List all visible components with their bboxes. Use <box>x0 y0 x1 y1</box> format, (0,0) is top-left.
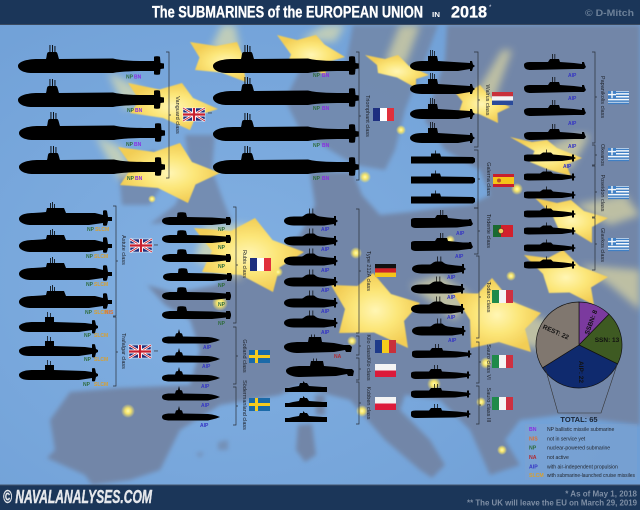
Astute class: SLCM <box>94 282 108 288</box>
title year: 2018 <box>451 2 487 22</box>
glow rays <box>95 25 640 350</box>
Vanguard class: Vanguard class <box>174 96 180 134</box>
Triomphant class <box>213 45 394 182</box>
Glavkos class <box>524 218 629 270</box>
Gotland class: AIP <box>203 345 212 351</box>
legend: NIS <box>529 436 538 442</box>
Rubis class: NP <box>218 283 226 289</box>
Triomphant class: NP <box>313 73 321 79</box>
title: The SUBMARINES of the EUROPEAN UNION <box>152 2 423 22</box>
Sodermanland class: Södermanland class <box>241 380 247 430</box>
pie chart <box>536 302 622 388</box>
Triomphant class: BN <box>322 143 330 149</box>
Trafalgar class: NP <box>83 382 91 388</box>
star 2 <box>277 35 345 75</box>
Poseidon class: Poseidon class <box>599 174 605 212</box>
credit: © D-Mitch <box>585 8 634 19</box>
EU stars <box>118 35 608 352</box>
Tridente class: Tridente class <box>485 214 491 248</box>
Type 212A class <box>284 208 396 336</box>
Trafalgar class <box>19 312 158 388</box>
Vanguard class: ** <box>208 112 212 118</box>
star 3 <box>128 83 218 130</box>
Astute class: SLCM <box>95 227 109 233</box>
Vanguard class: NP <box>126 142 134 148</box>
Sodermanland class <box>162 380 270 430</box>
star 1 <box>190 42 262 82</box>
Vanguard class: BN <box>134 74 142 80</box>
Kobben class <box>285 381 396 424</box>
Tridente class: AIP <box>456 231 465 237</box>
Triomphant class: NP <box>313 176 321 182</box>
Rubis class: Rubis class <box>241 250 247 278</box>
slice: REST <box>536 302 579 368</box>
Astute class: Astute class <box>120 235 126 265</box>
Type 212A class: Type 212A class <box>365 251 371 291</box>
Astute class: SLCM <box>94 310 108 316</box>
Vanguard class: NP <box>127 176 135 182</box>
legend: not active <box>547 455 569 461</box>
Vanguard class: NP <box>126 74 134 80</box>
Triomphant class: BN <box>322 106 330 112</box>
Triomphant class: BN <box>322 73 330 79</box>
Astute class: ** <box>154 244 158 250</box>
Todaro class: AIP <box>448 338 457 344</box>
Gotland class <box>162 327 270 390</box>
total funnel <box>545 365 617 413</box>
Rubis class: NP <box>218 264 226 270</box>
Galerna class <box>411 150 514 208</box>
Vanguard class: BN <box>134 142 142 148</box>
Todaro class: AIP <box>447 295 456 301</box>
Triomphant class: NP <box>313 143 321 149</box>
footer bar <box>0 484 640 510</box>
Sodermanland class: AIP <box>201 403 210 409</box>
Okeanos class: Okeanos <box>599 144 605 166</box>
Tridente class: AIP <box>455 254 464 260</box>
Type 212A class: AIP <box>321 288 330 294</box>
Type 212A class: AIP <box>321 268 330 274</box>
Papanikolis class: AIP <box>568 121 577 127</box>
legend: not in service yet <box>547 436 586 442</box>
Triomphant class: BN <box>322 176 330 182</box>
slice: SSN <box>579 314 622 364</box>
Trafalgar class: Trafalgar class <box>120 333 126 369</box>
Sauro class VI: Sauro class VI <box>485 344 491 380</box>
Trafalgar class: SLCM <box>94 333 108 339</box>
Papanikolis class: AIP <box>568 144 577 150</box>
site name: © NAVALANALYSES.COM <box>3 487 153 507</box>
Astute class: NP <box>86 254 94 260</box>
Sauro class III <box>411 384 513 424</box>
header bar <box>0 0 640 25</box>
Trafalgar class: ** <box>154 350 158 356</box>
slice: SSBN <box>579 302 609 345</box>
title in: IN <box>432 12 440 19</box>
Walrus class: Walrus class <box>484 85 490 116</box>
star 6 <box>453 85 510 123</box>
star 5 <box>365 55 429 88</box>
Glavkos class: Glavkos class <box>599 228 605 262</box>
Vanguard class <box>18 45 212 182</box>
legend: BN <box>529 427 537 433</box>
Trafalgar class: SLCM <box>94 382 108 388</box>
Gotland class: AIP <box>201 384 210 390</box>
Sodermanland class: AIP <box>200 423 209 429</box>
Rubis class: NP <box>218 321 226 327</box>
Okeanos class: AIP <box>563 164 572 170</box>
Kilo class Romania: NA <box>334 354 342 360</box>
asterisk: * <box>489 5 492 11</box>
Papanikolis class <box>524 52 629 150</box>
Rubis class <box>162 207 271 327</box>
star 10 <box>194 218 304 292</box>
Trafalgar class: NP <box>84 333 92 339</box>
star 12 <box>453 278 541 352</box>
Triomphant class: Triomphant class <box>364 95 370 137</box>
legend: with submarine-launched cruise missiles <box>547 473 635 479</box>
Triomphant class: NP <box>313 106 321 112</box>
Todaro class: AIP <box>447 275 456 281</box>
Vanguard class: NP <box>127 108 135 114</box>
legend: NA <box>529 455 537 461</box>
pie labels <box>541 309 620 383</box>
pie labels: REST: 22 <box>541 324 570 342</box>
pie labels: SSBN: 8 <box>584 309 599 336</box>
star 9 <box>524 250 608 305</box>
legend: NP <box>529 446 537 452</box>
star 7 <box>510 137 582 176</box>
Type 212A class: AIP <box>321 330 330 336</box>
pie labels: SSN: 13 <box>595 337 620 344</box>
Papanikolis class: AIP <box>568 73 577 79</box>
star 8 <box>535 198 608 243</box>
legend: with air-independent propulsion <box>547 464 618 470</box>
legend <box>525 424 637 480</box>
Papanikolis class: AIP <box>568 96 577 102</box>
Gotland class: AIP <box>202 364 211 370</box>
Sauro class VI <box>411 342 513 383</box>
footnote 2: ** The UK will leave the EU on March 29, 2019 <box>467 498 638 508</box>
Galerna class: Galerna class <box>485 162 491 196</box>
legend: SLCM <box>529 473 544 479</box>
Kilo class Poland <box>286 357 396 381</box>
legend: AIP <box>529 464 538 470</box>
Gotland class: Gotland class <box>241 339 247 373</box>
Type 212A class: AIP <box>321 227 330 233</box>
Todaro class <box>411 256 513 344</box>
footnote 1: * As of May 1, 2018 <box>565 490 638 498</box>
Vanguard class: BN <box>135 176 143 182</box>
Astute class: NP <box>86 282 94 288</box>
Astute class: NP <box>87 227 95 233</box>
Type 212A class: AIP <box>321 247 330 253</box>
Astute class: SLCM <box>94 254 108 260</box>
slice: AIP <box>542 345 618 388</box>
Vanguard class: BN <box>135 108 143 114</box>
Type 212A class: AIP <box>321 309 330 315</box>
Rubis class: NP <box>218 302 226 308</box>
star 11 <box>331 273 420 348</box>
Kilo class Poland: Kilo class <box>365 357 371 381</box>
total label: TOTAL: 65 <box>560 415 598 424</box>
Kobben class: Kobben class <box>365 386 371 420</box>
star 4 <box>118 143 220 203</box>
Rubis class: NP <box>218 227 226 233</box>
Sauro class III: Sauro class III <box>485 388 491 423</box>
Kilo class Romania: Kilo class <box>365 334 371 358</box>
Astute class: NIS <box>105 310 114 316</box>
Todaro class: Todaro class <box>485 282 491 313</box>
Astute class <box>19 202 158 316</box>
Okeanos class <box>524 144 629 170</box>
Trafalgar class: NP <box>84 357 92 363</box>
Papanikolis class: Papanikolis class <box>599 76 605 118</box>
legend: nuclear-powered submarine <box>547 446 610 452</box>
Rubis class: NP <box>218 245 226 251</box>
Tridente class <box>411 208 513 260</box>
small lights <box>121 125 523 455</box>
Todaro class: AIP <box>447 315 456 321</box>
Astute class: NP <box>85 310 93 316</box>
Poseidon class <box>524 166 629 218</box>
Trafalgar class: SLCM <box>94 357 108 363</box>
Kilo class Romania <box>284 334 396 360</box>
legend: NP ballistic missile submarine <box>547 427 614 433</box>
Walrus class <box>410 50 513 147</box>
pie labels: AIP: 22 <box>577 361 584 383</box>
